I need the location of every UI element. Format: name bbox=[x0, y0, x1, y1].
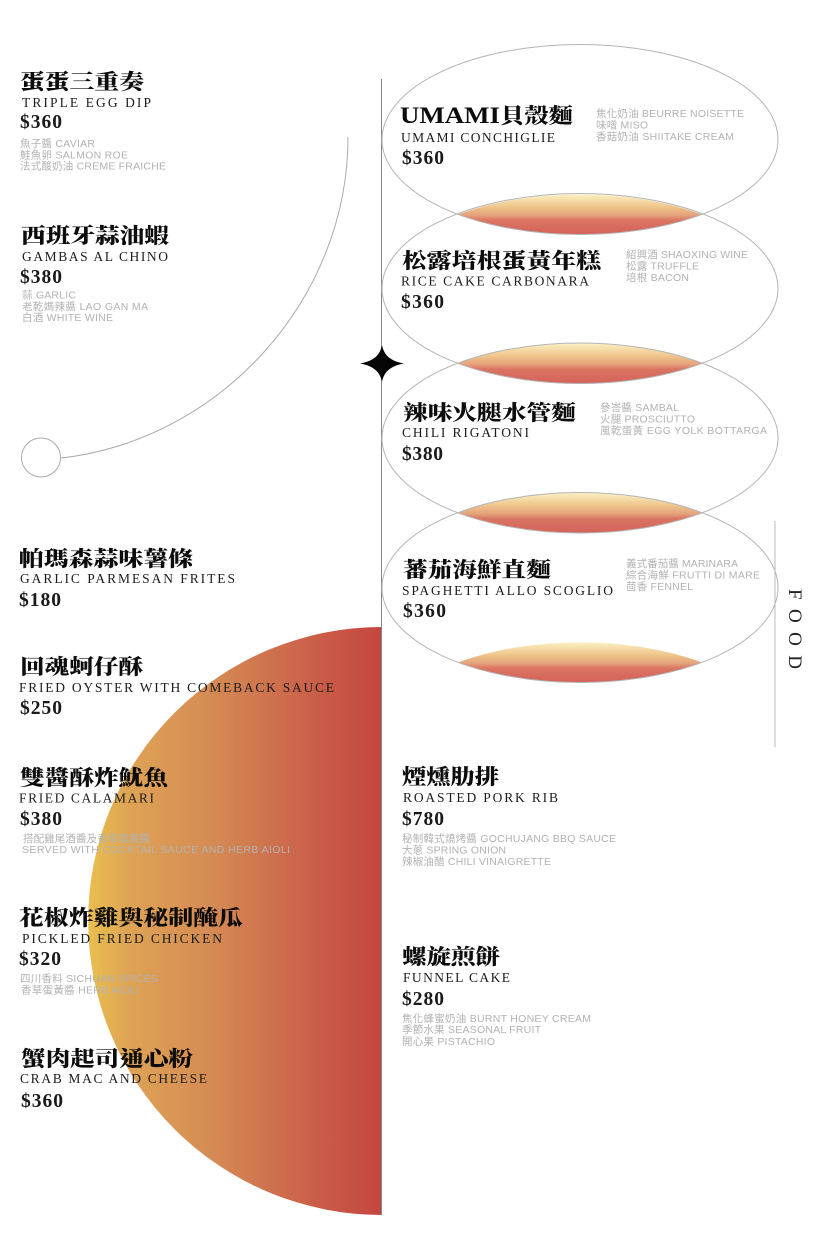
gradient semicircle bbox=[88, 627, 382, 1215]
item: chili rigatoni: 辣味火腿水管麵 bbox=[403, 401, 576, 425]
overlapping ellipses with lens shapes bbox=[382, 44, 778, 683]
item: umami conchiglie: 味噌 MISO bbox=[596, 118, 648, 132]
item: gambas al chino bbox=[20, 224, 169, 324]
item: spaghetti allo scoglio: 茴香 FENNEL bbox=[626, 581, 693, 593]
item: funnel cake: 焦化蜂蜜奶油 BURNT HONEY CREAM bbox=[402, 1012, 591, 1025]
item: triple egg dip bbox=[20, 70, 166, 172]
item: roasted pork rib: 大蔥 SPRING ONION bbox=[402, 844, 506, 856]
item: umami conchiglie: 焦化奶油 BEURRE NOISETTE bbox=[596, 107, 744, 120]
item: funnel cake: $280 bbox=[402, 989, 444, 1010]
item: crab mac and cheese: 蟹肉起司通心粉 bbox=[21, 1047, 193, 1071]
item: funnel cake bbox=[402, 945, 591, 1048]
item: umami conchiglie: 貝殼麵 bbox=[500, 104, 573, 128]
food side rule bbox=[774, 521, 776, 747]
item: fried oyster: 回魂蚵仔酥 bbox=[20, 655, 143, 679]
item: crab mac and cheese: CRAB MAC AND CHEESE bbox=[20, 1071, 207, 1086]
item: roasted pork rib: $780 bbox=[402, 809, 444, 830]
icon: four-point star bbox=[360, 345, 404, 382]
item: chili rigatoni: 火腿 PROSCIUTTO bbox=[600, 414, 695, 426]
item: triple egg dip: 法式酸奶油 CREME FRAICHE bbox=[20, 160, 166, 172]
section label: FOOD: FOOD bbox=[784, 589, 805, 669]
item: fried calamari: $380 bbox=[20, 809, 62, 830]
item: fried oyster: FRIED OYSTER WITH COMEBACK SAUCE bbox=[19, 680, 334, 695]
item: fried calamari: SERVED WITH COCKTAIL SAUCE AND HERB AIOLI bbox=[22, 844, 290, 856]
item: umami conchiglie: UMAMI CONCHIGLIE bbox=[401, 130, 555, 145]
item: gambas al chino: 蒜 GARLIC bbox=[22, 288, 76, 302]
item: fried calamari: FRIED CALAMARI bbox=[19, 790, 154, 806]
item: pickled fried chicken: 香草蛋黃醬 HERB AIOLI bbox=[21, 984, 139, 996]
item: fried oyster: $250 bbox=[20, 698, 62, 719]
item: rice cake carbonara: $360 bbox=[401, 292, 444, 313]
item: spaghetti allo scoglio: 義式番茄醬 MARINARA bbox=[626, 557, 738, 570]
item: garlic parmesan frites: 帕瑪森蒜味薯條 bbox=[19, 547, 195, 571]
item: spaghetti allo scoglio: 蕃茄海鮮直麵 bbox=[403, 558, 551, 582]
item: spaghetti allo scoglio: SPAGHETTI ALLO SCOGLIO bbox=[402, 583, 613, 598]
item: gambas al chino: GAMBAS AL CHINO bbox=[22, 249, 168, 264]
item: rice cake carbonara: 松露培根蛋黃年糕 bbox=[402, 249, 603, 273]
item: gambas al chino: 白酒 WHITE WINE bbox=[22, 311, 113, 324]
item: chili rigatoni bbox=[402, 401, 767, 465]
item: spaghetti allo scoglio: 綜合海鮮 FRUTTI DI MARE bbox=[626, 568, 760, 582]
item: garlic parmesan frites: GARLIC PARMESAN FRITES bbox=[20, 571, 235, 586]
item: rice cake carbonara: 紹興酒 SHAOXING WINE bbox=[626, 248, 748, 261]
item: spaghetti allo scoglio bbox=[402, 557, 760, 622]
item: rice cake carbonara bbox=[401, 248, 748, 313]
item: fried oyster bbox=[19, 655, 334, 719]
item: roasted pork rib: 煙燻肋排 bbox=[402, 765, 499, 789]
item: funnel cake: FUNNEL CAKE bbox=[403, 970, 510, 985]
item: triple egg dip: 魚子醬 CAVIAR bbox=[20, 137, 95, 150]
item: triple egg dip: TRIPLE EGG DIP bbox=[22, 95, 151, 110]
item: pickled fried chicken: 花椒炸雞與秘制醃瓜 bbox=[19, 906, 243, 930]
item: umami conchiglie: 香菇奶油 SHIITAKE CREAM bbox=[596, 130, 734, 143]
item: roasted pork rib: ROASTED PORK RIB bbox=[403, 790, 558, 805]
item: umami conchiglie bbox=[400, 103, 744, 169]
item: rice cake carbonara: 松露 TRUFFLE bbox=[626, 260, 699, 272]
item: gambas al chino: $380 bbox=[20, 267, 62, 288]
item: triple egg dip: 鮭魚卵 SALMON ROE bbox=[20, 148, 128, 162]
item: funnel cake: 開心果 PISTACHIO bbox=[402, 1036, 495, 1048]
item: roasted pork rib: 秘制韓式燒烤醬 GOCHUJANG BBQ SAUCE bbox=[402, 832, 616, 845]
item: spaghetti allo scoglio: $360 bbox=[403, 601, 446, 622]
item: triple egg dip: 蛋蛋三重奏 bbox=[20, 70, 148, 94]
item: umami conchiglie: $360 bbox=[402, 148, 444, 169]
item: rice cake carbonara: 培根 BACON bbox=[626, 271, 689, 284]
item: roasted pork rib bbox=[402, 765, 616, 868]
item: garlic parmesan frites: $180 bbox=[19, 590, 61, 611]
item: triple egg dip: $360 bbox=[20, 112, 62, 133]
item: chili rigatoni: $380 bbox=[402, 444, 443, 465]
arc with small circle bbox=[22, 137, 348, 477]
item: funnel cake: 季節水果 SEASONAL FRUIT bbox=[402, 1023, 542, 1036]
item: fried calamari bbox=[19, 766, 290, 856]
item: gambas al chino: 西班牙蒜油蝦 bbox=[21, 224, 169, 248]
item: crab mac and cheese: $360 bbox=[21, 1091, 63, 1112]
item: gambas al chino: 老乾媽辣醬 LAO GAN MA bbox=[22, 300, 148, 313]
item: chili rigatoni: 風乾蛋黃 EGG YOLK BOTTARGA bbox=[600, 424, 767, 437]
item: fried calamari: 雙醬酥炸魷魚 bbox=[20, 766, 170, 790]
item: rice cake carbonara: RICE CAKE CARBONARA bbox=[401, 274, 589, 288]
item: chili rigatoni: CHILI RIGATONI bbox=[402, 425, 530, 440]
item: roasted pork rib: 辣椒油醋 CHILI VINAIGRETTE bbox=[402, 855, 551, 868]
item: fried calamari: 搭配雞尾酒醬及香草蛋黃醬 bbox=[23, 832, 150, 845]
item: pickled fried chicken bbox=[19, 906, 243, 996]
vertical center line bbox=[380, 79, 382, 1215]
item: funnel cake: 螺旋煎餅 bbox=[402, 945, 500, 969]
item: garlic parmesan frites bbox=[19, 547, 235, 611]
item: umami conchiglie: UMAMI bbox=[400, 103, 500, 129]
item: pickled fried chicken: 四川香料 SICHUAN SPICES bbox=[20, 972, 158, 985]
item: crab mac and cheese bbox=[20, 1047, 207, 1112]
item: pickled fried chicken: $320 bbox=[19, 949, 61, 970]
item: chili rigatoni: 參峇醬 SAMBAL bbox=[600, 401, 679, 414]
item: pickled fried chicken: PICKLED FRIED CHICKEN bbox=[22, 931, 222, 946]
